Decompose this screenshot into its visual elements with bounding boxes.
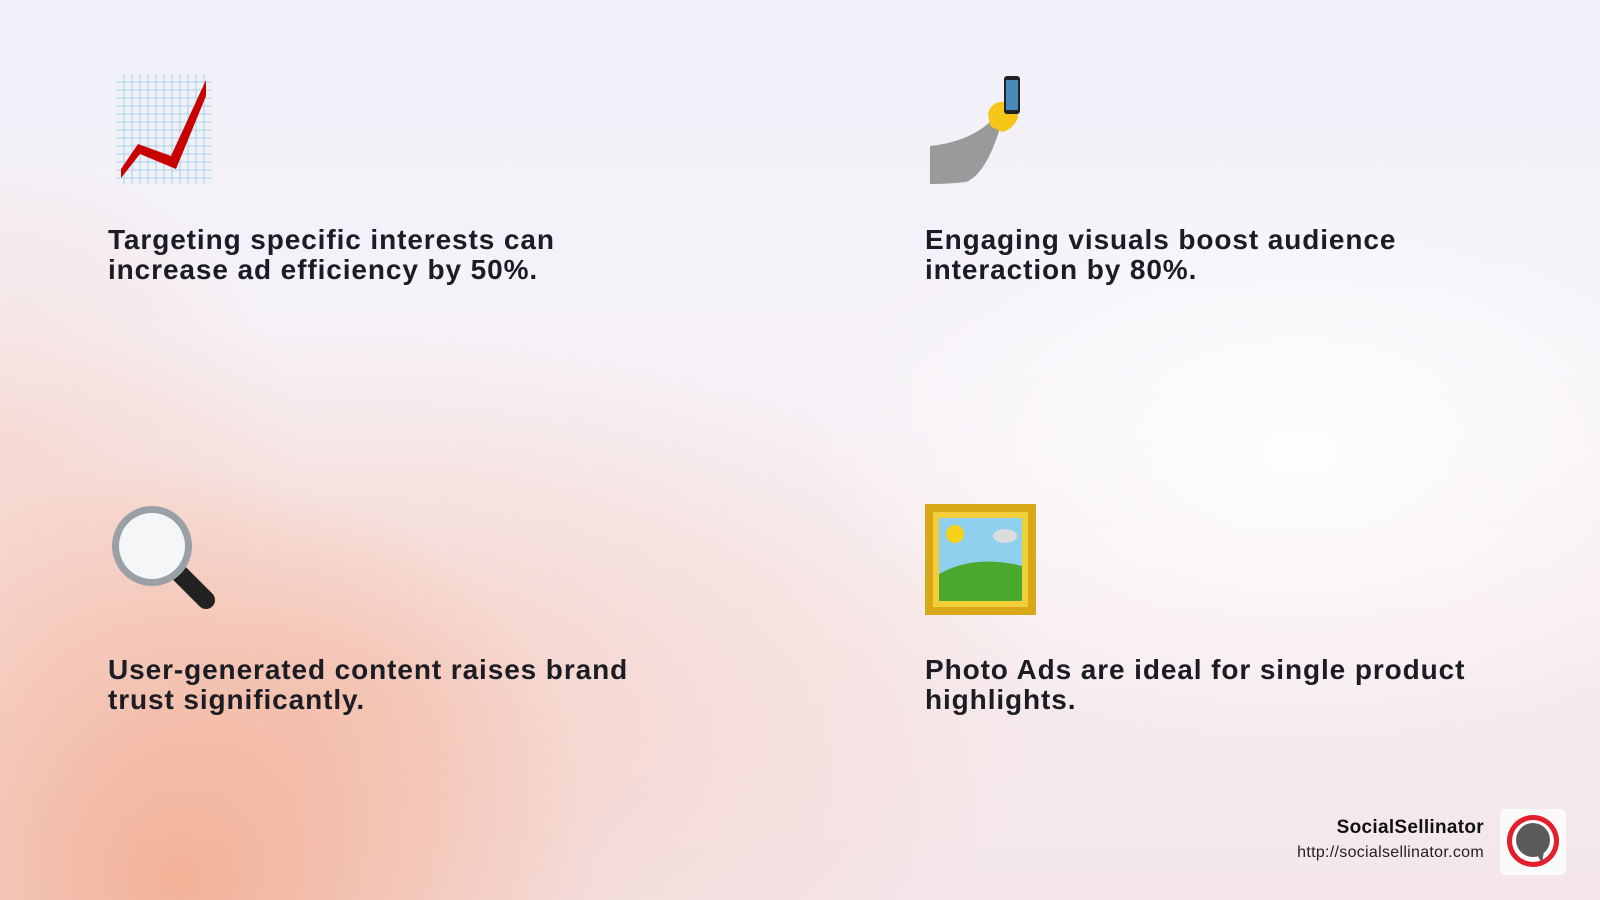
text: engaging: Engaging visuals boost audience bbox=[925, 224, 1396, 255]
logo bbox=[1500, 809, 1566, 875]
text: user-generated: User-generated content raises brand bbox=[108, 654, 628, 685]
text: user-generated: trust significantly. bbox=[108, 684, 365, 715]
text: engaging: interaction by 80%. bbox=[925, 254, 1197, 285]
footer brand bbox=[1297, 817, 1484, 861]
footer brand: http://socialsellinator.com bbox=[1297, 844, 1484, 861]
icon: magnifying glass bbox=[112, 506, 215, 609]
text: photo ads bbox=[925, 654, 1465, 715]
text: engaging bbox=[925, 224, 1396, 285]
text: targeting: increase ad efficiency by 50%. bbox=[108, 254, 538, 285]
text: user-generated bbox=[108, 654, 628, 715]
icon: framed picture bbox=[925, 504, 1036, 615]
icon: selfie arm bbox=[930, 76, 1020, 184]
text: targeting bbox=[108, 224, 555, 285]
text: photo ads: highlights. bbox=[925, 684, 1076, 715]
icon: chart increasing bbox=[116, 74, 212, 184]
text: targeting: Targeting specific interests can bbox=[108, 224, 555, 255]
footer brand: SocialSellinator bbox=[1337, 817, 1484, 838]
text: photo ads: Photo Ads are ideal for single product bbox=[925, 654, 1465, 685]
